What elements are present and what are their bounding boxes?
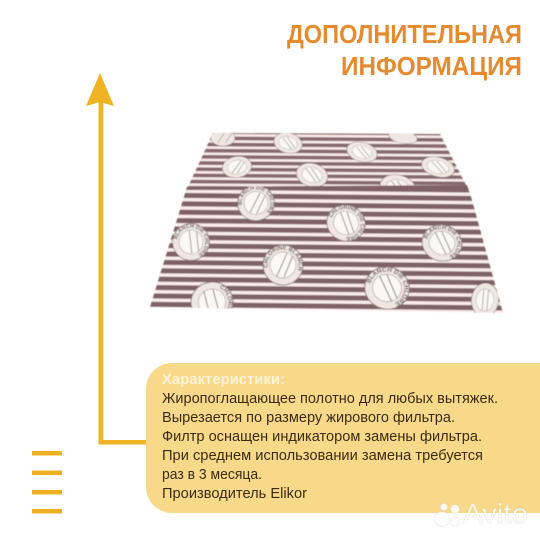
seal: printed logos: BLANCH DIE CHLORE [423, 224, 462, 260]
seal: printed logos [172, 186, 500, 314]
panel text block: Вырезается по размеру жирового фильтра. [162, 409, 455, 426]
product photo: grease filter sheet [150, 132, 503, 314]
watermark: Avito [434, 498, 528, 529]
watermark: Avito: Avito [463, 498, 528, 529]
seal: printed logos: BLANCH DIE CHLORE [237, 186, 275, 214]
panel text block: Жиропоглащающее полотно для любых вытяжек. [162, 390, 498, 407]
seal: printed logos: CHLORINE DIE CHLORE [328, 204, 366, 242]
panel text block: раз в 3 месяца. [162, 466, 262, 483]
seal: printed logos: CHLORINE [220, 284, 234, 309]
seal: printed logos: BLANCH DIE CHLORE [366, 266, 410, 307]
title [287, 19, 522, 81]
panel text block [162, 390, 498, 502]
front panel of filter [150, 184, 503, 314]
title: ИНФОРМАЦИЯ [341, 51, 522, 81]
arrow: connector from panel to filter [86, 73, 148, 444]
panel text block: При среднем использовании замена требуется [162, 447, 483, 464]
title: ДОПОЛНИТЕЛЬНАЯ [287, 19, 522, 49]
panel: characteristics [146, 363, 540, 513]
seal: printed logos: BLANCH DIE CHLORE [172, 224, 210, 258]
icon: menu dashes [32, 451, 62, 514]
panel text block: Производитель Elikor [162, 485, 307, 502]
panel heading: Характеристики: [162, 371, 285, 388]
seal: printed logos: CHLORINE BLANCH [262, 244, 304, 272]
back panel of filter [188, 132, 466, 188]
panel text block: Филтр оснащен индикатором замены фильтра. [162, 428, 482, 445]
